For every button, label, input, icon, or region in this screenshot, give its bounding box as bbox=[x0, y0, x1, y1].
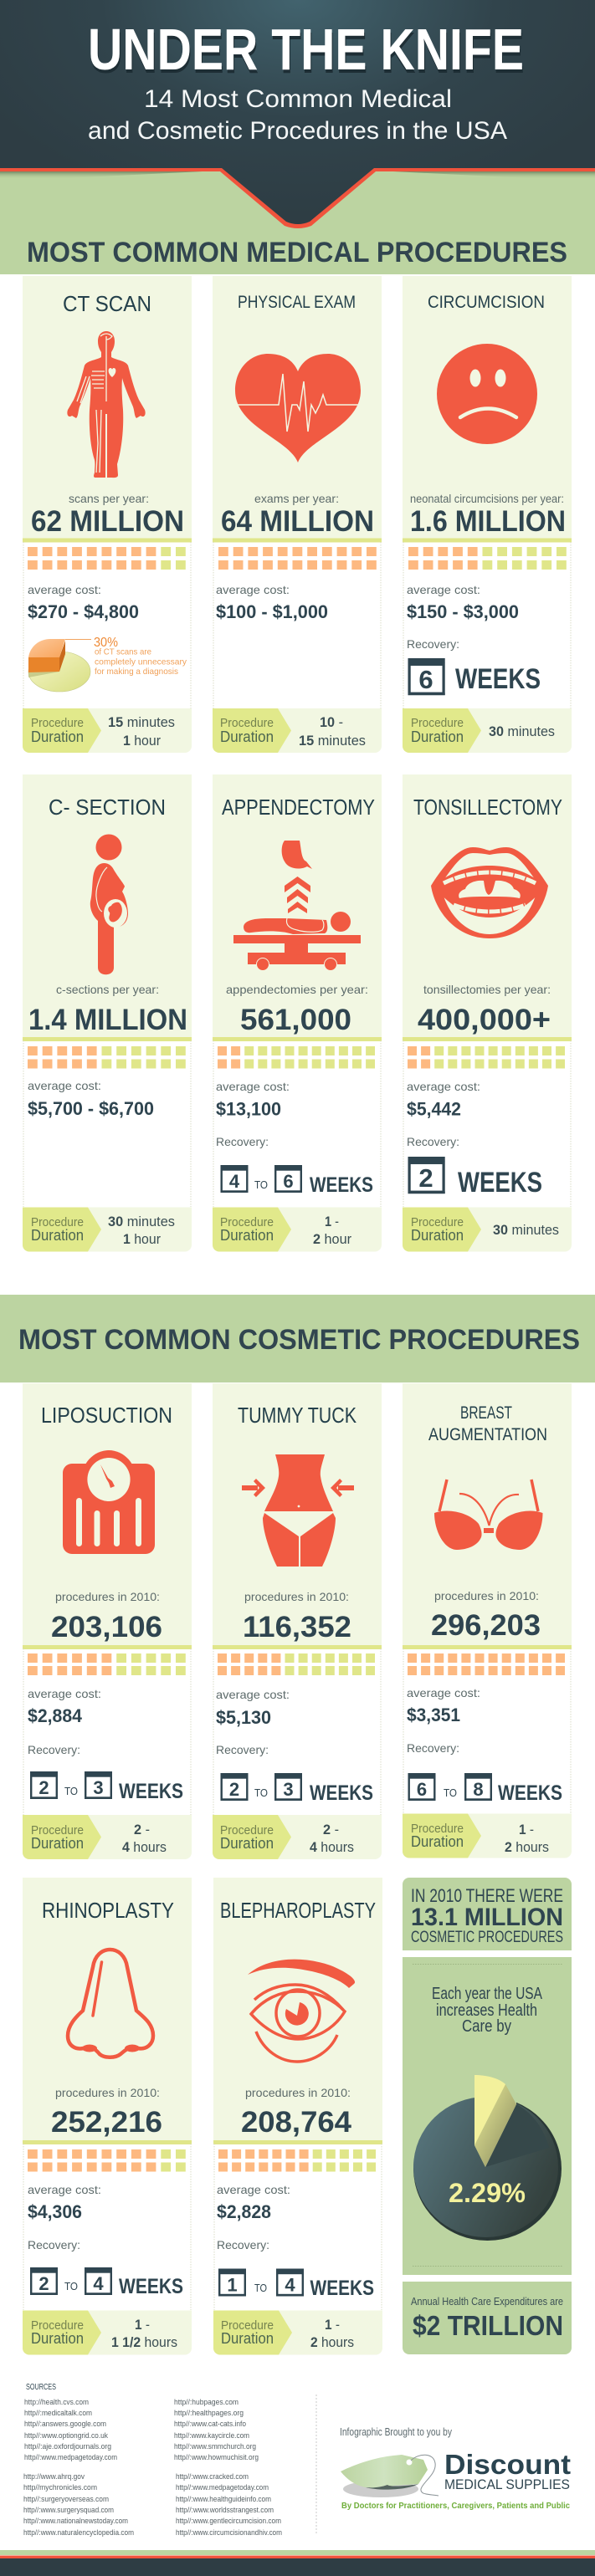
icon: sad face bbox=[437, 344, 537, 444]
recovery label: Recovery: bbox=[407, 637, 459, 651]
sources column 4: http//:www.healthguideinfo.com bbox=[176, 2495, 271, 2504]
procedure duration: Procedure bbox=[220, 716, 274, 730]
sources column 2: http//:www.kaycircle.com bbox=[174, 2431, 249, 2441]
procedure duration: 1 hour bbox=[123, 1231, 161, 1247]
heading: most common medical procedures: MOST COMMON MEDICAL PROCEDURES bbox=[27, 237, 567, 268]
header banner bbox=[0, 0, 595, 228]
procedure name: BREAST bbox=[460, 1403, 512, 1423]
panel: total cosmetic procedures: 13.1 MILLION bbox=[411, 1904, 563, 1931]
cost label: average cost: bbox=[216, 583, 290, 596]
recovery: 1 to 4 weeks bbox=[218, 2268, 374, 2300]
cost label: average cost: bbox=[216, 1080, 290, 1093]
procedure duration: 4 hours bbox=[310, 1839, 354, 1855]
square scale bbox=[218, 552, 377, 565]
cost value: $2,828 bbox=[217, 2201, 271, 2222]
panel: breast augmentation bbox=[403, 1383, 572, 1858]
recovery: 4 to 6 weeks: 4 bbox=[229, 1171, 240, 1192]
sources column 1: http://health.cvs.com bbox=[24, 2398, 89, 2407]
square scale bbox=[218, 2154, 376, 2167]
logo subtitle: MEDICAL SUPPLIES bbox=[444, 2476, 570, 2492]
sources column 2: http//:healthpages.org bbox=[174, 2409, 244, 2418]
cost label: average cost: bbox=[217, 2183, 290, 2196]
recovery: 2 to 3 weeks: 2 bbox=[229, 1779, 239, 1800]
recovery: 2 to 4 weeks bbox=[30, 2267, 183, 2298]
medical section green background bbox=[0, 168, 595, 274]
procedure duration bbox=[411, 1822, 549, 1855]
recovery label: Recovery: bbox=[216, 1743, 269, 1756]
procedure name: AUGMENTATION bbox=[428, 1425, 547, 1444]
square scale bbox=[28, 2154, 186, 2167]
procedure duration: Duration bbox=[220, 1227, 274, 1244]
stat number: 203,106 bbox=[51, 1611, 162, 1643]
procedure duration: 2 - bbox=[134, 1822, 150, 1837]
sources column 4: http//:www.worldsstrangest.com bbox=[176, 2506, 274, 2515]
panel: appendectomy bbox=[213, 774, 382, 1251]
procedure name: TONSILLECTOMY bbox=[413, 795, 562, 820]
panel: circumcision bbox=[403, 276, 572, 753]
panel: tonsillectomy bbox=[403, 774, 572, 1251]
procedure duration: Duration bbox=[411, 1227, 464, 1244]
icon: nose bbox=[68, 1950, 153, 2057]
recovery label: Recovery: bbox=[216, 1135, 269, 1148]
sources column 3: http//:surgeryoverseas.com bbox=[23, 2495, 109, 2504]
recovery: 2 to 3 weeks bbox=[221, 1773, 373, 1805]
procedure duration bbox=[220, 1214, 351, 1247]
cost value: $5,442 bbox=[407, 1099, 461, 1119]
cost label: average cost: bbox=[28, 1079, 101, 1092]
procedure duration bbox=[31, 714, 175, 749]
square scale bbox=[218, 1050, 375, 1064]
recovery: 2 to 3 weeks: 3 bbox=[93, 1777, 104, 1798]
panel: tummy tuck bbox=[213, 1383, 382, 1859]
icon: weighing scale bbox=[63, 1450, 155, 1554]
stat number: 64 MILLION bbox=[221, 505, 374, 538]
square scale bbox=[28, 1658, 186, 1671]
sources column 2: http//:www.howmuchisit.org bbox=[174, 2453, 259, 2462]
cost value: $13,100 bbox=[216, 1099, 281, 1119]
procedure duration: Procedure bbox=[31, 1215, 84, 1229]
procedure duration: Duration bbox=[220, 1835, 274, 1852]
recovery: 1 to 4 weeks: TO bbox=[254, 2282, 267, 2294]
logo tagline: By Doctors for Practitioners, Caregivers, Patients and Public bbox=[341, 2501, 570, 2511]
sources column 2: http//:www.cat-cats.info bbox=[174, 2420, 246, 2429]
sources column 1: http//:medicaltalk.com bbox=[24, 2409, 92, 2418]
icon: pregnant woman bbox=[90, 835, 128, 974]
panel: rhinoplasty bbox=[23, 1878, 192, 2355]
callout text: completely unnecessary bbox=[95, 657, 187, 667]
procedure duration: Duration bbox=[221, 2330, 274, 2347]
procedure duration: Duration bbox=[220, 728, 274, 745]
sources column 2: http//:hubpages.com bbox=[174, 2398, 239, 2407]
cost label: average cost: bbox=[28, 1687, 101, 1700]
recovery: 6 weeks: WEEKS bbox=[455, 663, 541, 695]
recovery label: Recovery: bbox=[407, 1741, 459, 1755]
procedure duration bbox=[31, 1214, 175, 1247]
recovery: 2 to 3 weeks: WEEKS bbox=[310, 1781, 373, 1805]
procedure name: TUMMY TUCK bbox=[238, 1403, 357, 1428]
text block: Each year the USA bbox=[432, 1985, 543, 2003]
cost value: $270 - $4,800 bbox=[28, 601, 139, 622]
panel: C-section bbox=[23, 774, 192, 1251]
cost label: average cost: bbox=[407, 583, 480, 596]
stat number: 252,216 bbox=[51, 2106, 162, 2139]
recovery label: Recovery: bbox=[28, 1743, 80, 1756]
procedure duration: 2 hours bbox=[310, 2334, 354, 2350]
recovery: 6 to 8 weeks: 8 bbox=[473, 1779, 484, 1800]
subtitle: 14 Most Common Medical bbox=[144, 85, 452, 113]
procedure name: LIPOSUCTION bbox=[41, 1403, 172, 1428]
procedure duration: Procedure bbox=[220, 1823, 274, 1837]
procedure duration: 15 minutes bbox=[299, 733, 366, 749]
panel: health care expenditures bbox=[403, 2282, 572, 2354]
icon: bra bbox=[434, 1480, 542, 1550]
icon: eye bbox=[248, 1960, 355, 2062]
cost value: $5,700 - $6,700 bbox=[28, 1098, 154, 1119]
recovery label: Recovery: bbox=[217, 2238, 269, 2251]
procedure duration: Procedure bbox=[31, 716, 84, 730]
procedure name: C- SECTION bbox=[49, 795, 166, 820]
recovery: 2 to 3 weeks: 3 bbox=[283, 1779, 294, 1800]
procedure duration: Duration bbox=[411, 728, 464, 745]
stat label: c-sections per year: bbox=[56, 983, 159, 996]
procedure duration: Duration bbox=[31, 1227, 84, 1244]
recovery: 6 to 8 weeks bbox=[408, 1773, 562, 1805]
procedure duration: 10 - bbox=[320, 714, 343, 730]
sponsor caption: Infographic Brought to you by bbox=[340, 2426, 453, 2438]
stat label: tonsillectomies per year: bbox=[423, 983, 551, 996]
cost value: $100 - $1,000 bbox=[216, 601, 328, 622]
stat label: procedures in 2010: bbox=[434, 1589, 539, 1602]
panel: total cosmetic procedures bbox=[403, 1878, 572, 1950]
subtitle bbox=[88, 85, 507, 145]
panel: CT scan bbox=[23, 276, 192, 753]
logo: leaf tag bbox=[341, 2455, 439, 2497]
cost label: average cost: bbox=[216, 1688, 290, 1701]
procedure duration: Procedure bbox=[220, 1215, 274, 1229]
text block bbox=[432, 1985, 543, 2036]
recovery: 1 to 4 weeks: 4 bbox=[285, 2275, 295, 2295]
recovery: 6 to 8 weeks: TO bbox=[444, 1786, 457, 1799]
cost label: average cost: bbox=[407, 1686, 480, 1699]
stat number: 208,764 bbox=[241, 2106, 352, 2139]
procedure duration: 30 minutes bbox=[489, 723, 555, 739]
sources column 4: http//:www.medpagetoday.com bbox=[176, 2483, 269, 2492]
stat number: 296,203 bbox=[431, 1609, 541, 1642]
recovery: 2 to 3 weeks bbox=[30, 1771, 183, 1803]
procedure name bbox=[428, 1403, 547, 1444]
subtitle: and Cosmetic Procedures in the USA bbox=[88, 117, 507, 145]
footer strip bbox=[0, 2550, 595, 2576]
text block: increases Health bbox=[436, 2001, 537, 2020]
stat number: 561,000 bbox=[240, 1004, 351, 1036]
procedure duration: 2 hours bbox=[505, 1839, 549, 1855]
icon: human body bbox=[67, 331, 146, 478]
stat label: procedures in 2010: bbox=[55, 1590, 160, 1603]
stat number: 400,000+ bbox=[418, 1004, 551, 1036]
sources column 1: http//:aje.oxfordjournals.org bbox=[24, 2442, 111, 2451]
procedure duration: Duration bbox=[411, 1833, 464, 1850]
callout text: 30% bbox=[94, 636, 118, 650]
procedure name: APPENDECTOMY bbox=[222, 795, 375, 820]
square scale bbox=[218, 1658, 375, 1671]
recovery: 2 to 4 weeks: 4 bbox=[93, 2273, 104, 2294]
sources column 2 bbox=[174, 2398, 259, 2462]
panel: physical exam bbox=[213, 276, 382, 753]
sources bbox=[23, 2382, 282, 2538]
procedure duration: 1 - bbox=[325, 1214, 339, 1229]
panel: liposuction bbox=[23, 1383, 192, 1859]
sources column 1: http//:www.optiongrid.co.uk bbox=[24, 2431, 108, 2441]
cost label: average cost: bbox=[407, 1080, 480, 1093]
sources column 1 bbox=[24, 2398, 117, 2462]
heading: most common cosmetic procedures: MOST COMMON COSMETIC PROCEDURES bbox=[18, 1324, 580, 1356]
icon: operating table bbox=[233, 841, 361, 970]
callout text: for making a diagnosis bbox=[95, 667, 178, 677]
procedure duration: 1 - bbox=[135, 2317, 150, 2333]
stat label: exams per year: bbox=[254, 492, 339, 505]
sources column 3: http//:www.surgerysquad.com bbox=[23, 2506, 114, 2515]
recovery: 2 to 3 weeks: TO bbox=[64, 1785, 78, 1797]
sources heading: SOURCES bbox=[26, 2382, 56, 2392]
procedure duration: 15 minutes bbox=[108, 714, 175, 730]
panel: health care expenditures: Annual Health Care Expenditures are bbox=[411, 2295, 563, 2308]
recovery: 4 to 6 weeks: 6 bbox=[283, 1171, 294, 1192]
panel: health care increase bbox=[403, 1957, 572, 2275]
sponsor block bbox=[340, 2426, 571, 2511]
procedure duration bbox=[31, 2317, 177, 2350]
procedure name: RHINOPLASTY bbox=[42, 1898, 174, 1923]
procedure duration bbox=[220, 1822, 354, 1855]
stat label: procedures in 2010: bbox=[245, 2086, 351, 2099]
procedure duration: 1 hour bbox=[123, 733, 161, 749]
recovery: 2 to 4 weeks: 2 bbox=[38, 2273, 49, 2294]
procedure duration bbox=[411, 1215, 559, 1244]
procedure duration bbox=[221, 2317, 354, 2350]
procedure name: PHYSICAL EXAM bbox=[238, 293, 356, 312]
text block: Care by bbox=[462, 2017, 511, 2036]
procedure name: CT SCAN bbox=[63, 291, 151, 316]
cost value: $150 - $3,000 bbox=[407, 601, 519, 622]
panel: health care expenditures: $2 TRILLION bbox=[413, 2310, 563, 2341]
stat label: neonatal circumcisions per year: bbox=[410, 492, 564, 505]
square scale bbox=[28, 1050, 186, 1064]
icon: open mouth bbox=[431, 847, 548, 938]
procedure duration: 1 - bbox=[519, 1822, 534, 1837]
stat number: 1.4 MILLION bbox=[28, 1004, 187, 1036]
panel: blepharoplasty bbox=[213, 1878, 382, 2355]
header shadow bbox=[0, 171, 595, 179]
procedure duration: 2 - bbox=[323, 1822, 339, 1837]
recovery: 2 to 3 weeks: WEEKS bbox=[119, 1780, 183, 1803]
stat label: scans per year: bbox=[69, 492, 149, 505]
procedure duration: 30 minutes bbox=[493, 1222, 559, 1238]
procedure duration: Procedure bbox=[31, 2318, 84, 2333]
procedure duration: 1 - bbox=[325, 2317, 340, 2333]
cost value: $4,306 bbox=[28, 2201, 82, 2222]
procedure duration: Procedure bbox=[411, 1215, 464, 1229]
procedure duration: Procedure bbox=[221, 2318, 274, 2333]
procedure duration: Duration bbox=[31, 2330, 84, 2347]
procedure duration: Duration bbox=[31, 728, 84, 745]
stat number: 1.6 MILLION bbox=[410, 505, 566, 538]
recovery: 4 to 6 weeks bbox=[221, 1165, 373, 1197]
procedure duration bbox=[220, 714, 366, 749]
recovery: 1 to 4 weeks: 1 bbox=[227, 2275, 238, 2295]
sources column 3: http//:www.naturalencyclopedia.com bbox=[23, 2528, 134, 2538]
stat label: procedures in 2010: bbox=[55, 2086, 160, 2099]
recovery: 4 to 6 weeks: TO bbox=[254, 1178, 268, 1191]
icon: heart with ECG bbox=[235, 354, 361, 463]
sources column 4: http//:www.circumcisionandhiv.com bbox=[176, 2528, 282, 2538]
pie chart: 2.29 percent bbox=[413, 2075, 562, 2241]
recovery: 6 to 8 weeks: 6 bbox=[417, 1779, 427, 1800]
procedure duration bbox=[411, 716, 555, 745]
sources column 3 bbox=[23, 2472, 134, 2538]
procedure name: CIRCUMCISION bbox=[428, 293, 545, 312]
sources column 3: http//mychronicles.com bbox=[23, 2483, 97, 2492]
recovery: 2 weeks: WEEKS bbox=[458, 1167, 542, 1199]
sources column 4 bbox=[176, 2472, 282, 2538]
recovery: 1 to 4 weeks: WEEKS bbox=[310, 2277, 374, 2300]
recovery: 2 weeks bbox=[408, 1157, 542, 1199]
procedure duration: Procedure bbox=[31, 1823, 84, 1837]
recovery: 6 weeks bbox=[408, 658, 541, 695]
procedure duration: 4 hours bbox=[122, 1839, 167, 1855]
recovery: 2 weeks: 2 bbox=[418, 1163, 433, 1193]
procedure duration: Procedure bbox=[411, 716, 464, 730]
square scale bbox=[28, 552, 186, 565]
procedure duration: 1 1/2 hours bbox=[111, 2334, 177, 2350]
cost value: $5,130 bbox=[216, 1707, 271, 1728]
recovery: 6 to 8 weeks: WEEKS bbox=[498, 1781, 562, 1805]
icon: waist bbox=[242, 1454, 354, 1567]
recovery: 4 to 6 weeks: WEEKS bbox=[310, 1173, 373, 1197]
square scale bbox=[408, 1050, 565, 1064]
sources column 3: http//:www.nationalnewstoday.com bbox=[23, 2517, 128, 2526]
pie value: 2.29% bbox=[449, 2178, 526, 2208]
sources column 3: http://www.ahrq.gov bbox=[23, 2472, 85, 2481]
cost label: average cost: bbox=[28, 2183, 101, 2196]
recovery label: Recovery: bbox=[28, 2238, 80, 2251]
procedure duration: Procedure bbox=[411, 1822, 464, 1836]
cost label: average cost: bbox=[28, 583, 101, 596]
recovery label: Recovery: bbox=[407, 1135, 459, 1148]
sources column 4: http//:www.gentlecircumcision.com bbox=[176, 2517, 281, 2526]
stat number: 116,352 bbox=[243, 1611, 351, 1643]
procedure duration: 2 hour bbox=[313, 1231, 351, 1247]
procedure name: BLEPHAROPLASTY bbox=[220, 1898, 376, 1923]
recovery: 2 to 4 weeks: TO bbox=[64, 2280, 78, 2292]
callout text bbox=[94, 636, 187, 677]
cost value: $2,884 bbox=[28, 1705, 83, 1726]
sources column 2: http//:www.smmchurch.org bbox=[174, 2442, 256, 2451]
logo wordmark: Discount bbox=[444, 2449, 571, 2480]
square scale bbox=[408, 552, 567, 565]
recovery: 2 to 3 weeks: TO bbox=[254, 1786, 268, 1799]
cosmetic section banner bbox=[0, 1295, 595, 1383]
pie chart: 30 percent bbox=[28, 639, 91, 692]
procedure duration: Duration bbox=[31, 1835, 84, 1852]
stat label: appendectomies per year: bbox=[226, 983, 368, 996]
square scale bbox=[408, 1658, 565, 1671]
recovery: 2 to 3 weeks: 2 bbox=[38, 1777, 49, 1798]
recovery: 2 to 4 weeks: WEEKS bbox=[119, 2275, 183, 2298]
cost value: $3,351 bbox=[407, 1705, 460, 1725]
procedure duration bbox=[31, 1822, 167, 1855]
callout text: of CT scans are bbox=[95, 647, 151, 657]
stat label: procedures in 2010: bbox=[244, 1590, 349, 1603]
procedure duration: 30 minutes bbox=[108, 1214, 175, 1229]
recovery: 6 weeks: 6 bbox=[418, 665, 433, 694]
sources column 1: http//:www.medpagetoday.com bbox=[24, 2453, 117, 2462]
sources column 1: http//:answers.google.com bbox=[24, 2420, 106, 2429]
sources column 4: http//:www.cracked.com bbox=[176, 2472, 249, 2481]
stat number: 62 MILLION bbox=[31, 505, 184, 538]
